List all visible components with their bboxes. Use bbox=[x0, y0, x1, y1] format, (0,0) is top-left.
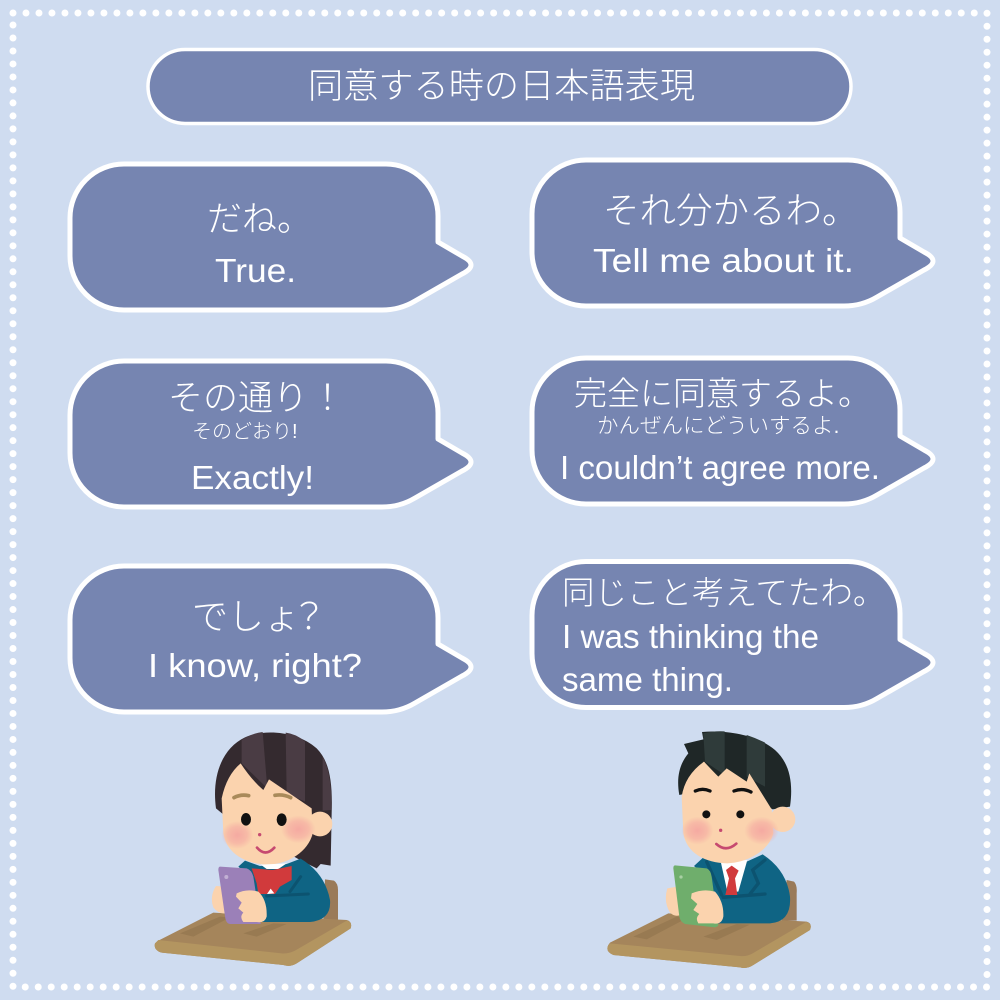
illustration: boy with smartphone at desk bbox=[607, 731, 811, 968]
speech bubble: Tell me about it: それ分かるわ。 bbox=[603, 190, 858, 231]
speech bubble: Tell me about it: Tell me about it. bbox=[593, 243, 854, 280]
speech bubble: Tell me about it bbox=[532, 160, 933, 306]
speech bubble: I couldn't agree more: 完全に同意するよ。 bbox=[574, 375, 871, 412]
title banner bbox=[148, 50, 851, 124]
speech bubble: True: True. bbox=[215, 253, 296, 290]
speech bubble: Exactly bbox=[70, 361, 471, 507]
speech bubble: I was thinking the same thing: I was thinking the bbox=[562, 619, 819, 656]
speech bubble: I was thinking the same thing bbox=[532, 562, 933, 708]
speech bubble: I was thinking the same thing: 同じこと考えてたわ。 bbox=[562, 575, 885, 611]
speech bubble: Exactly: Exactly! bbox=[191, 460, 314, 497]
speech bubble: I couldn't agree more bbox=[532, 358, 933, 504]
speech bubble: I know, right bbox=[70, 566, 471, 712]
speech bubble: I know, right: I know, right? bbox=[148, 648, 362, 685]
speech bubble: Exactly: その通り！ bbox=[168, 379, 345, 418]
speech bubble: I was thinking the same thing: same thing. bbox=[562, 662, 733, 699]
speech bubble: True: だね。 bbox=[207, 200, 312, 239]
illustration: girl with smartphone at desk bbox=[155, 732, 351, 966]
speech bubble: I know, right: でしょ？ bbox=[192, 596, 327, 637]
speech bubble: True bbox=[70, 164, 471, 310]
title banner: 同意する時の日本語表現 bbox=[308, 67, 695, 106]
speech bubble: Exactly: そのどおり! bbox=[192, 421, 298, 443]
speech bubble: I couldn't agree more: I couldn’t agree more. bbox=[560, 450, 880, 487]
speech bubble: I couldn't agree more: かんぜんにどういするよ. bbox=[597, 414, 839, 438]
